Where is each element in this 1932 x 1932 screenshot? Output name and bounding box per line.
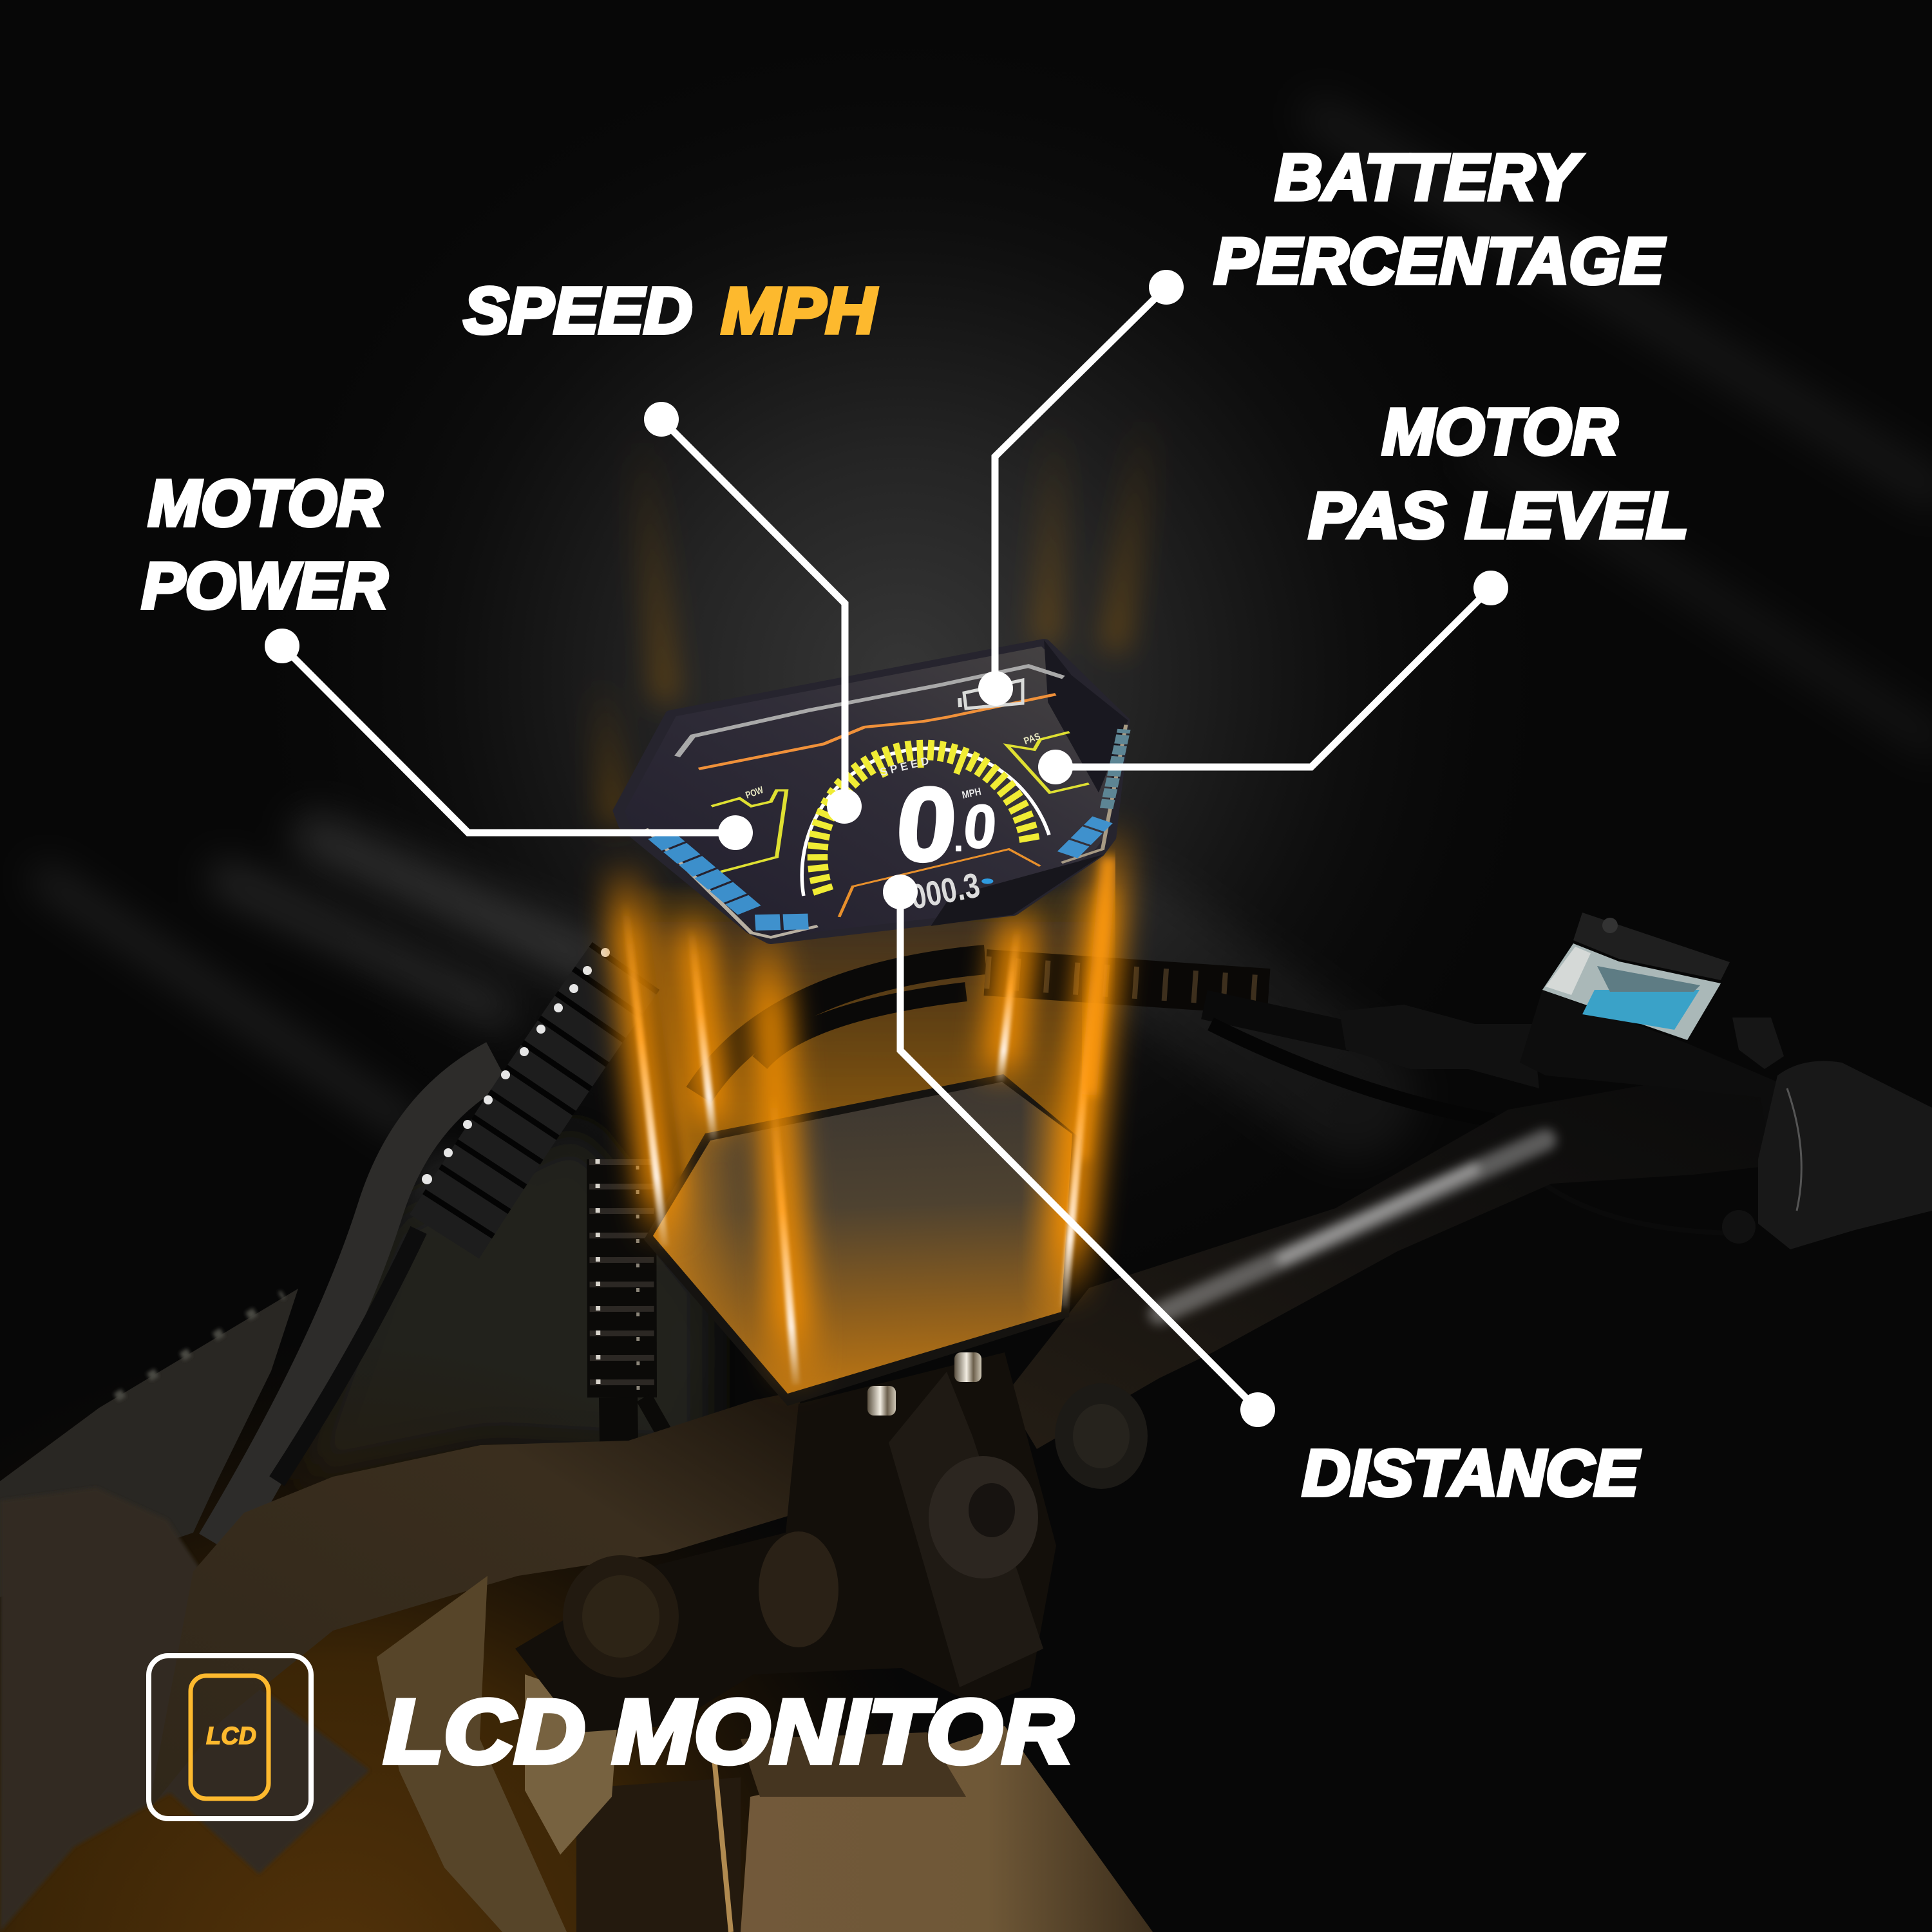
title: LCD MONITOR: [384, 1681, 1073, 1782]
speed readout digits: 0: [961, 793, 999, 861]
gauge labels: PAS: [1023, 731, 1042, 747]
label: motor power: POWER: [142, 550, 388, 622]
orange light beams: [602, 412, 1146, 1385]
gauge labels: MPH: [961, 786, 982, 801]
orange reflected screen: [653, 1082, 1072, 1394]
left handlebar: [148, 1391, 813, 1811]
cable sheath: [219, 1063, 497, 1546]
label: motor PAS level: [1309, 396, 1689, 552]
label: battery percentage: BATTERY: [1275, 142, 1583, 214]
left lever and grip: [0, 1289, 370, 1932]
brake fluid reservoir: [1542, 913, 1730, 1040]
frame tube: [377, 1576, 1153, 1932]
right handlebar: [1005, 1085, 1771, 1449]
coil cable left: [422, 948, 626, 1236]
callout leader: battery: [978, 270, 1184, 706]
speed readout digits: .: [953, 817, 964, 860]
light volume: [644, 889, 1121, 1179]
label: battery percentage: [1214, 142, 1665, 298]
label: speed mph: MPH: [721, 275, 877, 347]
speed readout digits: [892, 766, 999, 883]
label: motor power: MOTOR: [148, 468, 383, 540]
right grip: [1722, 1061, 1932, 1249]
callout leader: speed: [644, 402, 862, 824]
brake connector and master cylinder: [1340, 990, 1816, 1133]
label: motor power: [142, 468, 388, 622]
label: speed mph: SPEED: [464, 275, 692, 347]
label: motor PAS level: PAS LEVEL: [1309, 480, 1689, 552]
gauge labels: [744, 731, 1042, 801]
label: battery percentage: PERCENTAGE: [1214, 225, 1665, 298]
stem clamp: [515, 1352, 1148, 1797]
callout leader: PAS level: [1038, 571, 1508, 784]
label: speed mph: [464, 275, 877, 347]
gauge labels: SPEED: [878, 753, 933, 779]
callout leader: motor power: [265, 629, 753, 850]
label: distance: DISTANCE: [1302, 1437, 1640, 1510]
badge icon: LCD: LCD: [206, 1723, 256, 1750]
speed gauge ticks: [802, 740, 1049, 896]
callout leader: distance: [883, 875, 1275, 1427]
LCD display panel: [619, 640, 1128, 941]
physical monitor body: [644, 1074, 1082, 1406]
label: motor PAS level: MOTOR: [1382, 396, 1618, 468]
gauge labels: POW: [744, 784, 765, 801]
battery icon on display: [960, 680, 1023, 708]
right coil and cables: [699, 960, 1732, 1233]
coil cable centre: [598, 1159, 670, 1443]
speed readout digits: 0: [892, 766, 961, 883]
badge icon: LCD: [149, 1656, 311, 1819]
odometer readout: 000.3: [907, 866, 983, 917]
